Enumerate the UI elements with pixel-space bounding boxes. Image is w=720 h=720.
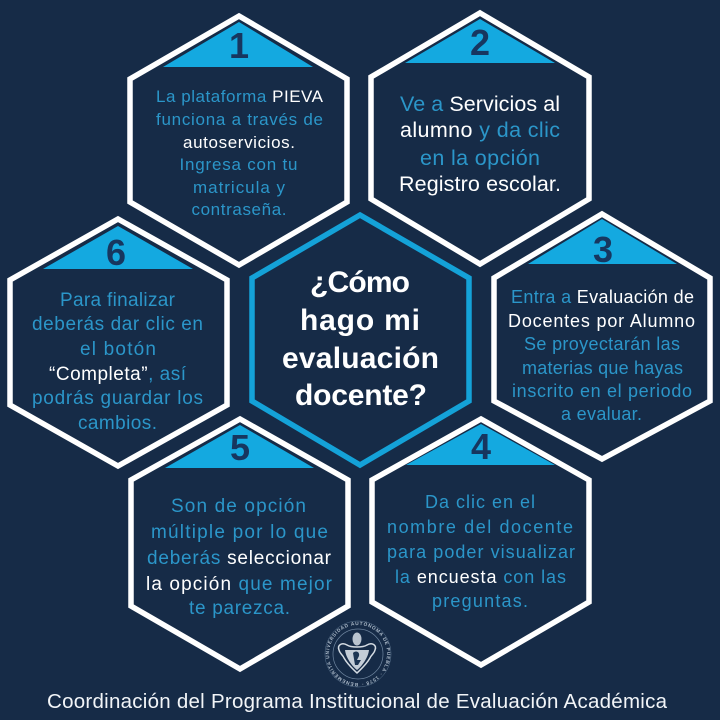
step 2 text: alumno y da clic bbox=[400, 118, 560, 142]
step 3 text: a evaluar. bbox=[561, 404, 642, 424]
step 1 text: Ingresa con tu bbox=[180, 155, 298, 174]
panel: step 2 bbox=[371, 13, 589, 264]
step 4 text: preguntas. bbox=[432, 591, 528, 611]
title: docente? bbox=[295, 379, 427, 412]
step 4 text: la encuesta con las bbox=[395, 567, 566, 587]
step 1 text: funciona a través de bbox=[156, 110, 323, 129]
footer text: Coordinación del Programa Institucional de Evaluación Académica bbox=[47, 690, 668, 713]
step 6 text bbox=[32, 290, 203, 434]
step 5 text: deberás seleccionar bbox=[147, 548, 332, 569]
title: ¿Cómo bbox=[310, 266, 410, 299]
step 5 text: múltiple por lo que bbox=[151, 522, 328, 543]
panel: step 1 bbox=[130, 16, 347, 265]
icon: university seal: BENEMÉRITA UNIVERSIDAD AUTÓNOMA DE PUEBLA · 1578 · bbox=[326, 622, 390, 686]
panel: step 2: 2 bbox=[470, 22, 490, 63]
step 6 text: podrás guardar los bbox=[32, 388, 203, 409]
step 1 text: contraseña. bbox=[192, 200, 286, 219]
step 5 text: Son de opción bbox=[171, 496, 306, 517]
panel: step 3: 3 bbox=[593, 229, 613, 270]
step 3 text: inscrito en el periodo bbox=[512, 381, 692, 401]
step 2 text bbox=[399, 92, 561, 196]
step 5 text: te parezca. bbox=[189, 598, 290, 619]
step 1 text: matricula y bbox=[193, 178, 286, 197]
step 3 text: Docentes por Alumno bbox=[508, 311, 695, 331]
step 1 text: La plataforma PIEVA bbox=[156, 87, 324, 106]
step 6 text: cambios. bbox=[78, 413, 157, 434]
panel: central question bbox=[252, 215, 469, 465]
step 3 text: Se proyectarán las bbox=[524, 334, 680, 354]
step 2 text: Registro escolar. bbox=[399, 172, 561, 196]
step 6 text: deberás dar clic en bbox=[32, 314, 203, 335]
step 4 text: Da clic en el bbox=[425, 492, 535, 512]
panel: step 6: 6 bbox=[106, 232, 126, 273]
panel: step 3 bbox=[494, 214, 710, 459]
panel: step 6 bbox=[10, 219, 227, 466]
title bbox=[282, 266, 439, 412]
panel: step 1: 1 bbox=[229, 25, 249, 66]
panel: step 5: 5 bbox=[230, 427, 250, 468]
step 4 text bbox=[387, 492, 575, 611]
panel: step 5 bbox=[131, 419, 348, 669]
step 6 text: el botón bbox=[80, 339, 156, 360]
step 1 text: autoservicios. bbox=[183, 133, 295, 152]
step 3 text: materias que hayas bbox=[522, 358, 683, 378]
title: hago mi bbox=[300, 304, 420, 337]
step 5 text bbox=[146, 496, 333, 619]
title: evaluación bbox=[282, 342, 439, 375]
step 3 text bbox=[508, 287, 695, 424]
step 6 text: Para finalizar bbox=[60, 290, 176, 311]
step 4 text: nombre del docente bbox=[387, 517, 573, 537]
step 2 text: Ve a Servicios al bbox=[400, 92, 560, 116]
step 6 text: “Completa”, así bbox=[49, 364, 187, 385]
step 2 text: en la opción bbox=[420, 146, 540, 170]
step 5 text: la opción que mejor bbox=[146, 574, 333, 595]
step 4 text: para poder visualizar bbox=[387, 542, 575, 562]
panel: step 4 bbox=[372, 419, 589, 665]
step 1 text bbox=[156, 87, 324, 219]
step 3 text: Entra a Evaluación de bbox=[511, 287, 694, 307]
panel: step 4: 4 bbox=[471, 426, 491, 467]
